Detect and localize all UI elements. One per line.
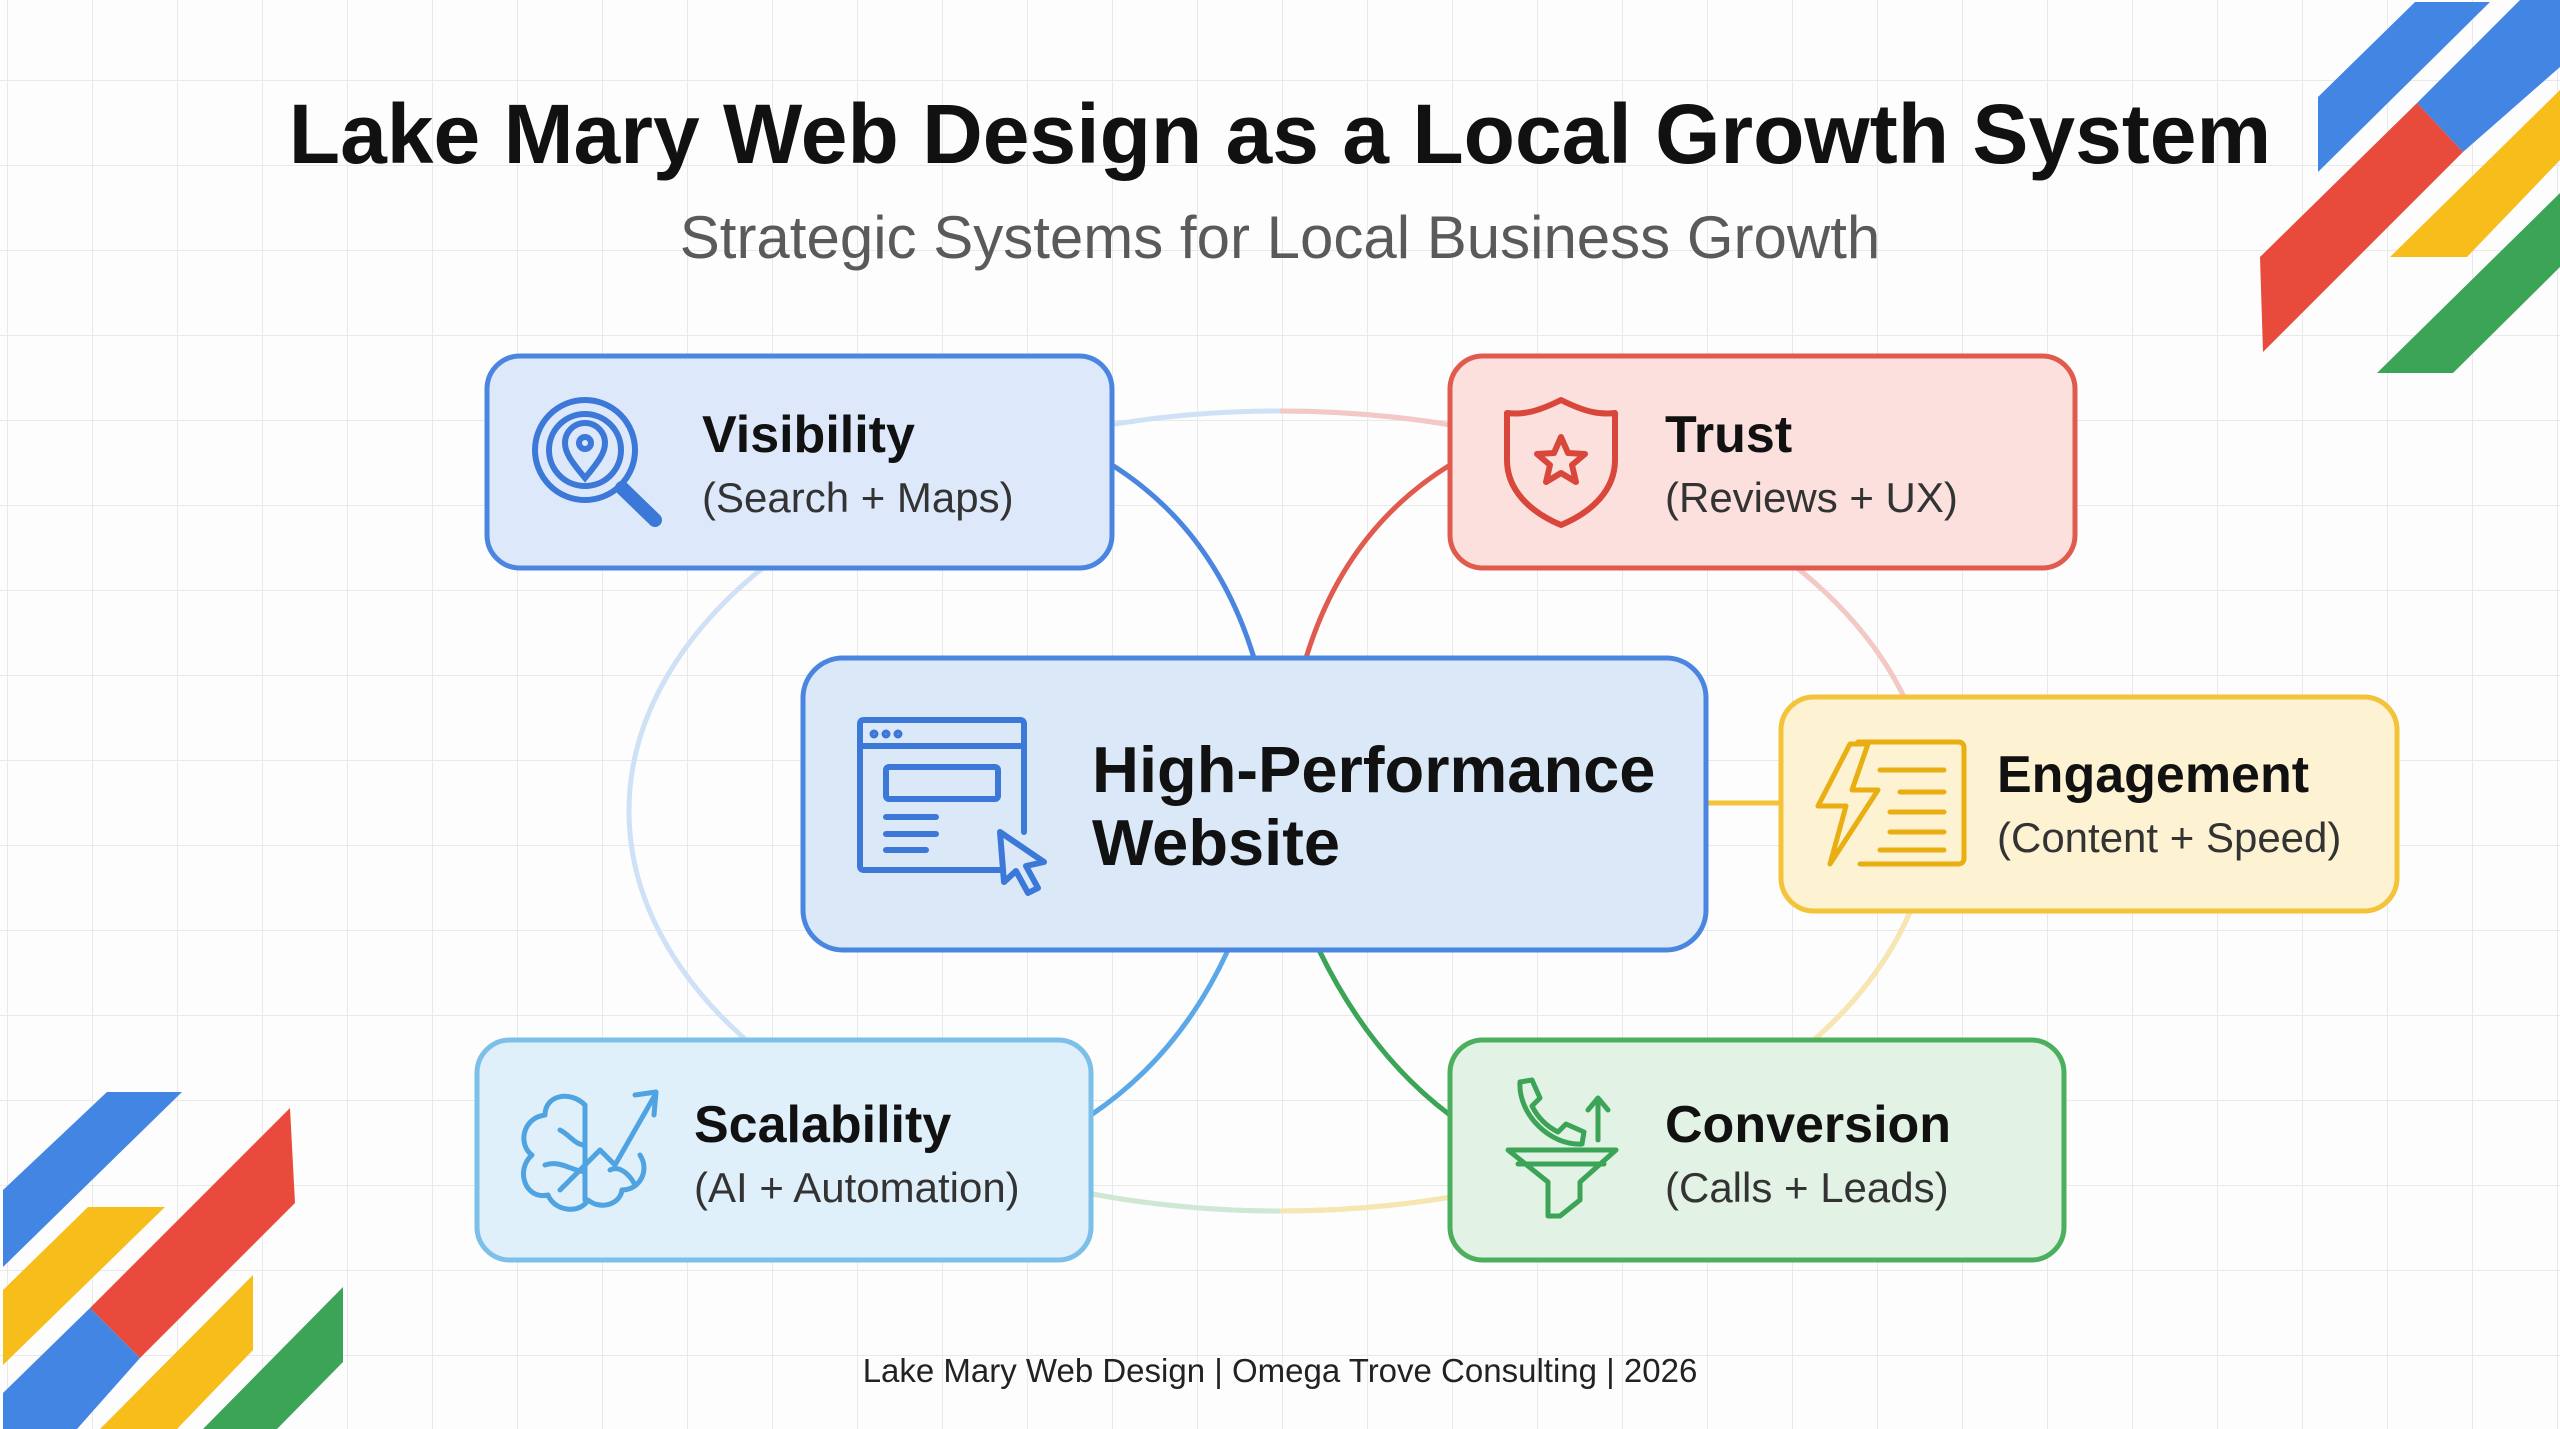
text: trust: Trust	[1665, 406, 1792, 464]
subtitle: Strategic Systems for Local Business Growth	[680, 204, 1880, 271]
connector: trust to center	[1306, 465, 1450, 658]
icon: browser with cursor	[860, 720, 1044, 893]
connector: conversion to center	[1319, 950, 1450, 1115]
icon: lightning page	[1818, 742, 1964, 864]
connector: visibility to center	[1112, 465, 1254, 658]
icon: shield star	[1507, 400, 1615, 525]
icon: phone funnel	[1508, 1080, 1616, 1216]
icon: map pin magnifier	[535, 400, 655, 520]
text: conversion: Conversion	[1665, 1096, 1951, 1154]
panel: scalability	[477, 1040, 1091, 1260]
panel: visibility	[487, 356, 1112, 568]
panel: trust	[1450, 356, 2075, 568]
connector: engagement to center	[1706, 800, 1781, 806]
text: center: High-Performance	[1092, 733, 1655, 806]
connector: scalability to center	[1091, 950, 1228, 1115]
panel: scalability: (AI + Automation)	[694, 1164, 1020, 1211]
text: engagement: Engagement	[1997, 746, 2309, 804]
panel: engagement: (Content + Speed)	[1997, 814, 2341, 861]
panel: trust: (Reviews + UX)	[1665, 474, 1958, 521]
decoration: bottom-left stripes	[3, 1092, 343, 1429]
panel: engagement	[1781, 697, 2397, 911]
panel: conversion: (Calls + Leads)	[1665, 1164, 1949, 1211]
panel: visibility: (Search + Maps)	[702, 474, 1014, 521]
text: visibility: Visibility	[702, 406, 915, 464]
panel: conversion	[1450, 1040, 2064, 1260]
title: Lake Mary Web Design as a Local Growth System	[289, 87, 2271, 181]
decoration: top-right stripes	[2260, 0, 2560, 373]
faded orbit ellipse	[629, 411, 1931, 1211]
panel: center high-performance website	[803, 658, 1706, 950]
icon: brain with arrow	[523, 1092, 656, 1209]
text: scalability: Scalability	[694, 1096, 951, 1154]
footer: Lake Mary Web Design | Omega Trove Consulting | 2026	[863, 1352, 1697, 1389]
panel: center high-performance website: Website	[1092, 806, 1340, 879]
